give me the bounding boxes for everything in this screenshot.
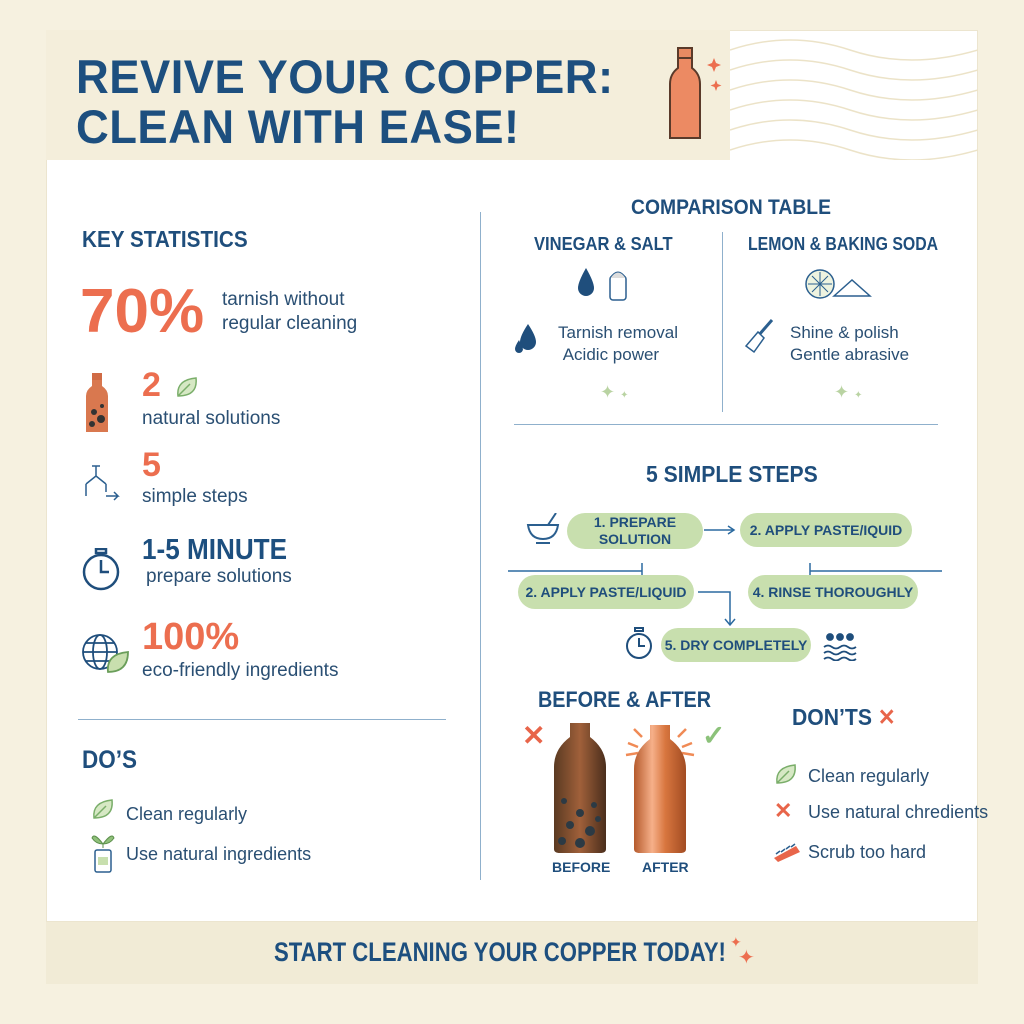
- wavy decoration: [730, 39, 977, 160]
- item: clean regularly: Clean regularly: [126, 804, 247, 824]
- heading: comparison: COMPARISON TABLE: [631, 196, 831, 219]
- white card: [46, 30, 978, 922]
- column: vinegar & salt: Acidic power: [563, 345, 659, 364]
- panel: do's: [82, 746, 311, 873]
- heading: key statistics: KEY STATISTICS: [82, 226, 248, 252]
- stat 2: 2: [142, 366, 161, 404]
- header band: [46, 30, 730, 160]
- stat 2: [86, 366, 280, 432]
- item: natural ingredients: [92, 836, 311, 873]
- image: before bottle: [554, 723, 606, 853]
- column: lemon & baking soda: Shine & polish: [790, 323, 899, 342]
- column: vinegar & salt: Tarnish removal: [558, 323, 678, 342]
- stat 1-5 minute: prepare solutions: [146, 566, 292, 587]
- stat 70%: regular cleaning: [222, 313, 357, 334]
- icon: sparkles: ✦: [730, 934, 742, 950]
- panel: before & after: BEFORE: [552, 859, 610, 875]
- stat 5: [85, 446, 248, 507]
- icon: copper bottle header: [669, 47, 722, 139]
- column: vinegar & salt: ✦ ✦: [600, 382, 628, 402]
- step 5: [661, 628, 811, 662]
- step 4: [748, 575, 918, 609]
- title: REVIVE YOUR COPPER:: [76, 50, 614, 103]
- panel: comparison table: [515, 196, 938, 412]
- step 4: 4. RINSE THOROUGHLY: [753, 584, 913, 600]
- item: Scrub too hard: [808, 842, 926, 862]
- step 2: [740, 513, 912, 547]
- heading: steps: 5 SIMPLE STEPS: [646, 461, 818, 487]
- column: vinegar & salt: [515, 234, 678, 402]
- stat 70%: [80, 277, 357, 346]
- panel: don'ts: [774, 704, 988, 862]
- item: Use natural chredients: [808, 802, 988, 822]
- icon: red x: ✕: [522, 720, 545, 751]
- icon: green check: ✓: [702, 720, 725, 751]
- icon: sparkles: [730, 934, 755, 969]
- stat 100%: 100%: [142, 616, 239, 658]
- stat 100%: eco-friendly ingredients: [142, 660, 338, 681]
- column: lemon & baking soda: LEMON & BAKING SODA: [748, 234, 938, 254]
- stat 5: 5: [142, 446, 161, 484]
- footer text: START CLEANING YOUR COPPER TODAY!: [274, 937, 726, 967]
- vertical divider: [480, 212, 481, 880]
- icon: water: [824, 633, 856, 661]
- step 5: 5. DRY COMPLETELY: [665, 636, 807, 652]
- heading: DON’TS ✕: [792, 704, 896, 730]
- column: lemon & baking soda: [745, 234, 938, 402]
- step 2b: [518, 575, 694, 609]
- column: lemon & baking soda: ✦ ✦: [834, 382, 862, 402]
- stat 70%: tarnish without: [222, 289, 345, 310]
- column: lemon & baking soda: Gentle abrasive: [790, 345, 909, 364]
- step 1: 1. PREPARE: [594, 514, 676, 530]
- icon: sparkles: ✦: [738, 947, 755, 969]
- stat 100%: [82, 616, 338, 681]
- stat 5: simple steps: [142, 486, 248, 507]
- step 1: [567, 513, 703, 549]
- item: clean regularly: [93, 799, 247, 824]
- item: ✕: [774, 798, 792, 823]
- title: [76, 50, 614, 153]
- step 1: SOLUTION: [599, 531, 671, 547]
- stat 1-5 minute: [82, 534, 292, 590]
- item: [774, 798, 988, 823]
- panel: before & after: [522, 687, 725, 875]
- footer banner: [46, 922, 978, 984]
- step 2b: 2. APPLY PASTE/LIQUID: [525, 584, 687, 600]
- image: after bottle: [626, 725, 694, 853]
- stat 1-5 minute: 1-5 MINUTE: [142, 534, 287, 566]
- step 2: 2. APPLY PASTE/IQUID: [750, 522, 902, 538]
- item: Clean regularly: [808, 766, 929, 786]
- title: CLEAN WITH EASE!: [76, 100, 520, 153]
- panel: before & after: AFTER: [642, 859, 689, 875]
- icon: mortar: [526, 513, 560, 544]
- heading: dos: DO’S: [82, 746, 137, 774]
- stat 2: natural solutions: [142, 408, 280, 429]
- item: natural ingredients: Use natural ingredients: [126, 844, 311, 864]
- icon: stopwatch: [626, 627, 652, 659]
- stat 70%: 70%: [80, 277, 204, 346]
- panel: 5 simple steps: [508, 461, 942, 662]
- panel: key statistics: [80, 226, 357, 681]
- heading: BEFORE & AFTER: [538, 687, 711, 712]
- column: vinegar & salt: VINEGAR & SALT: [534, 234, 673, 254]
